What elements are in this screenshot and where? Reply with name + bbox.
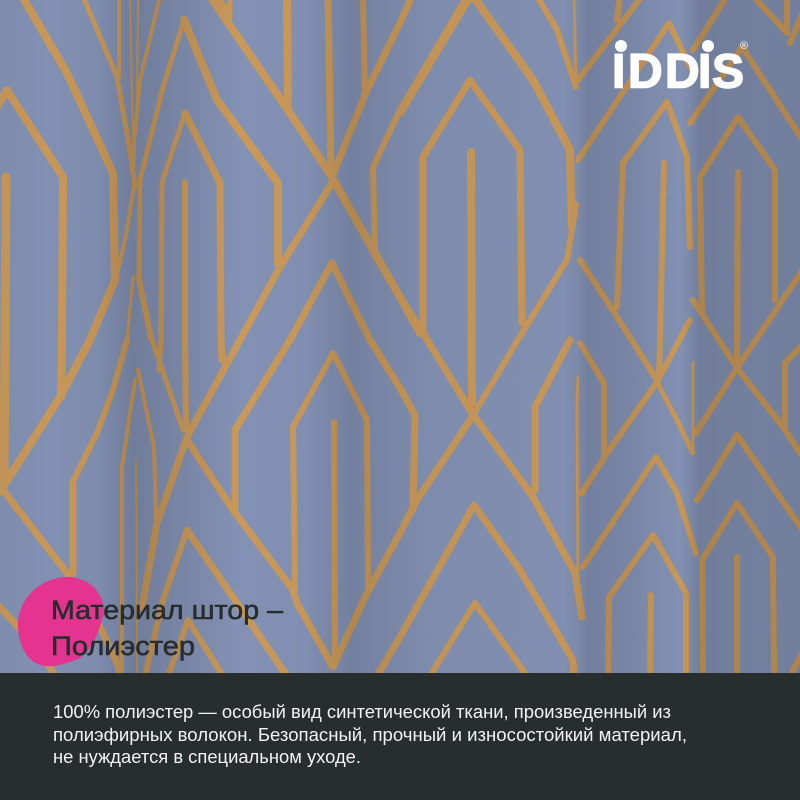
logo i dots (615, 40, 714, 52)
logo registered mark: ® (740, 40, 748, 52)
description line 1: 100% полиэстер — особый вид синтетической ткани, произведенный из (53, 701, 671, 722)
logo: IDDIS (612, 40, 748, 98)
description line 3: не нуждается в специальном уходе. (53, 746, 361, 767)
heading (51, 595, 283, 661)
panel: description band (0, 673, 800, 800)
heading line 1: Материал штор – (51, 595, 283, 625)
pink blob accent (18, 577, 104, 666)
heading line 2: Полиэстер (51, 631, 195, 661)
art deco pattern: right panels (578, 0, 800, 676)
description text (53, 701, 687, 767)
logo wordmark: IDDIS (612, 46, 744, 98)
art deco pattern: left panel (0, 0, 582, 676)
description line 2: полиэфирных волокон. Безопасный, прочный и износостойкий материал, (53, 724, 687, 745)
